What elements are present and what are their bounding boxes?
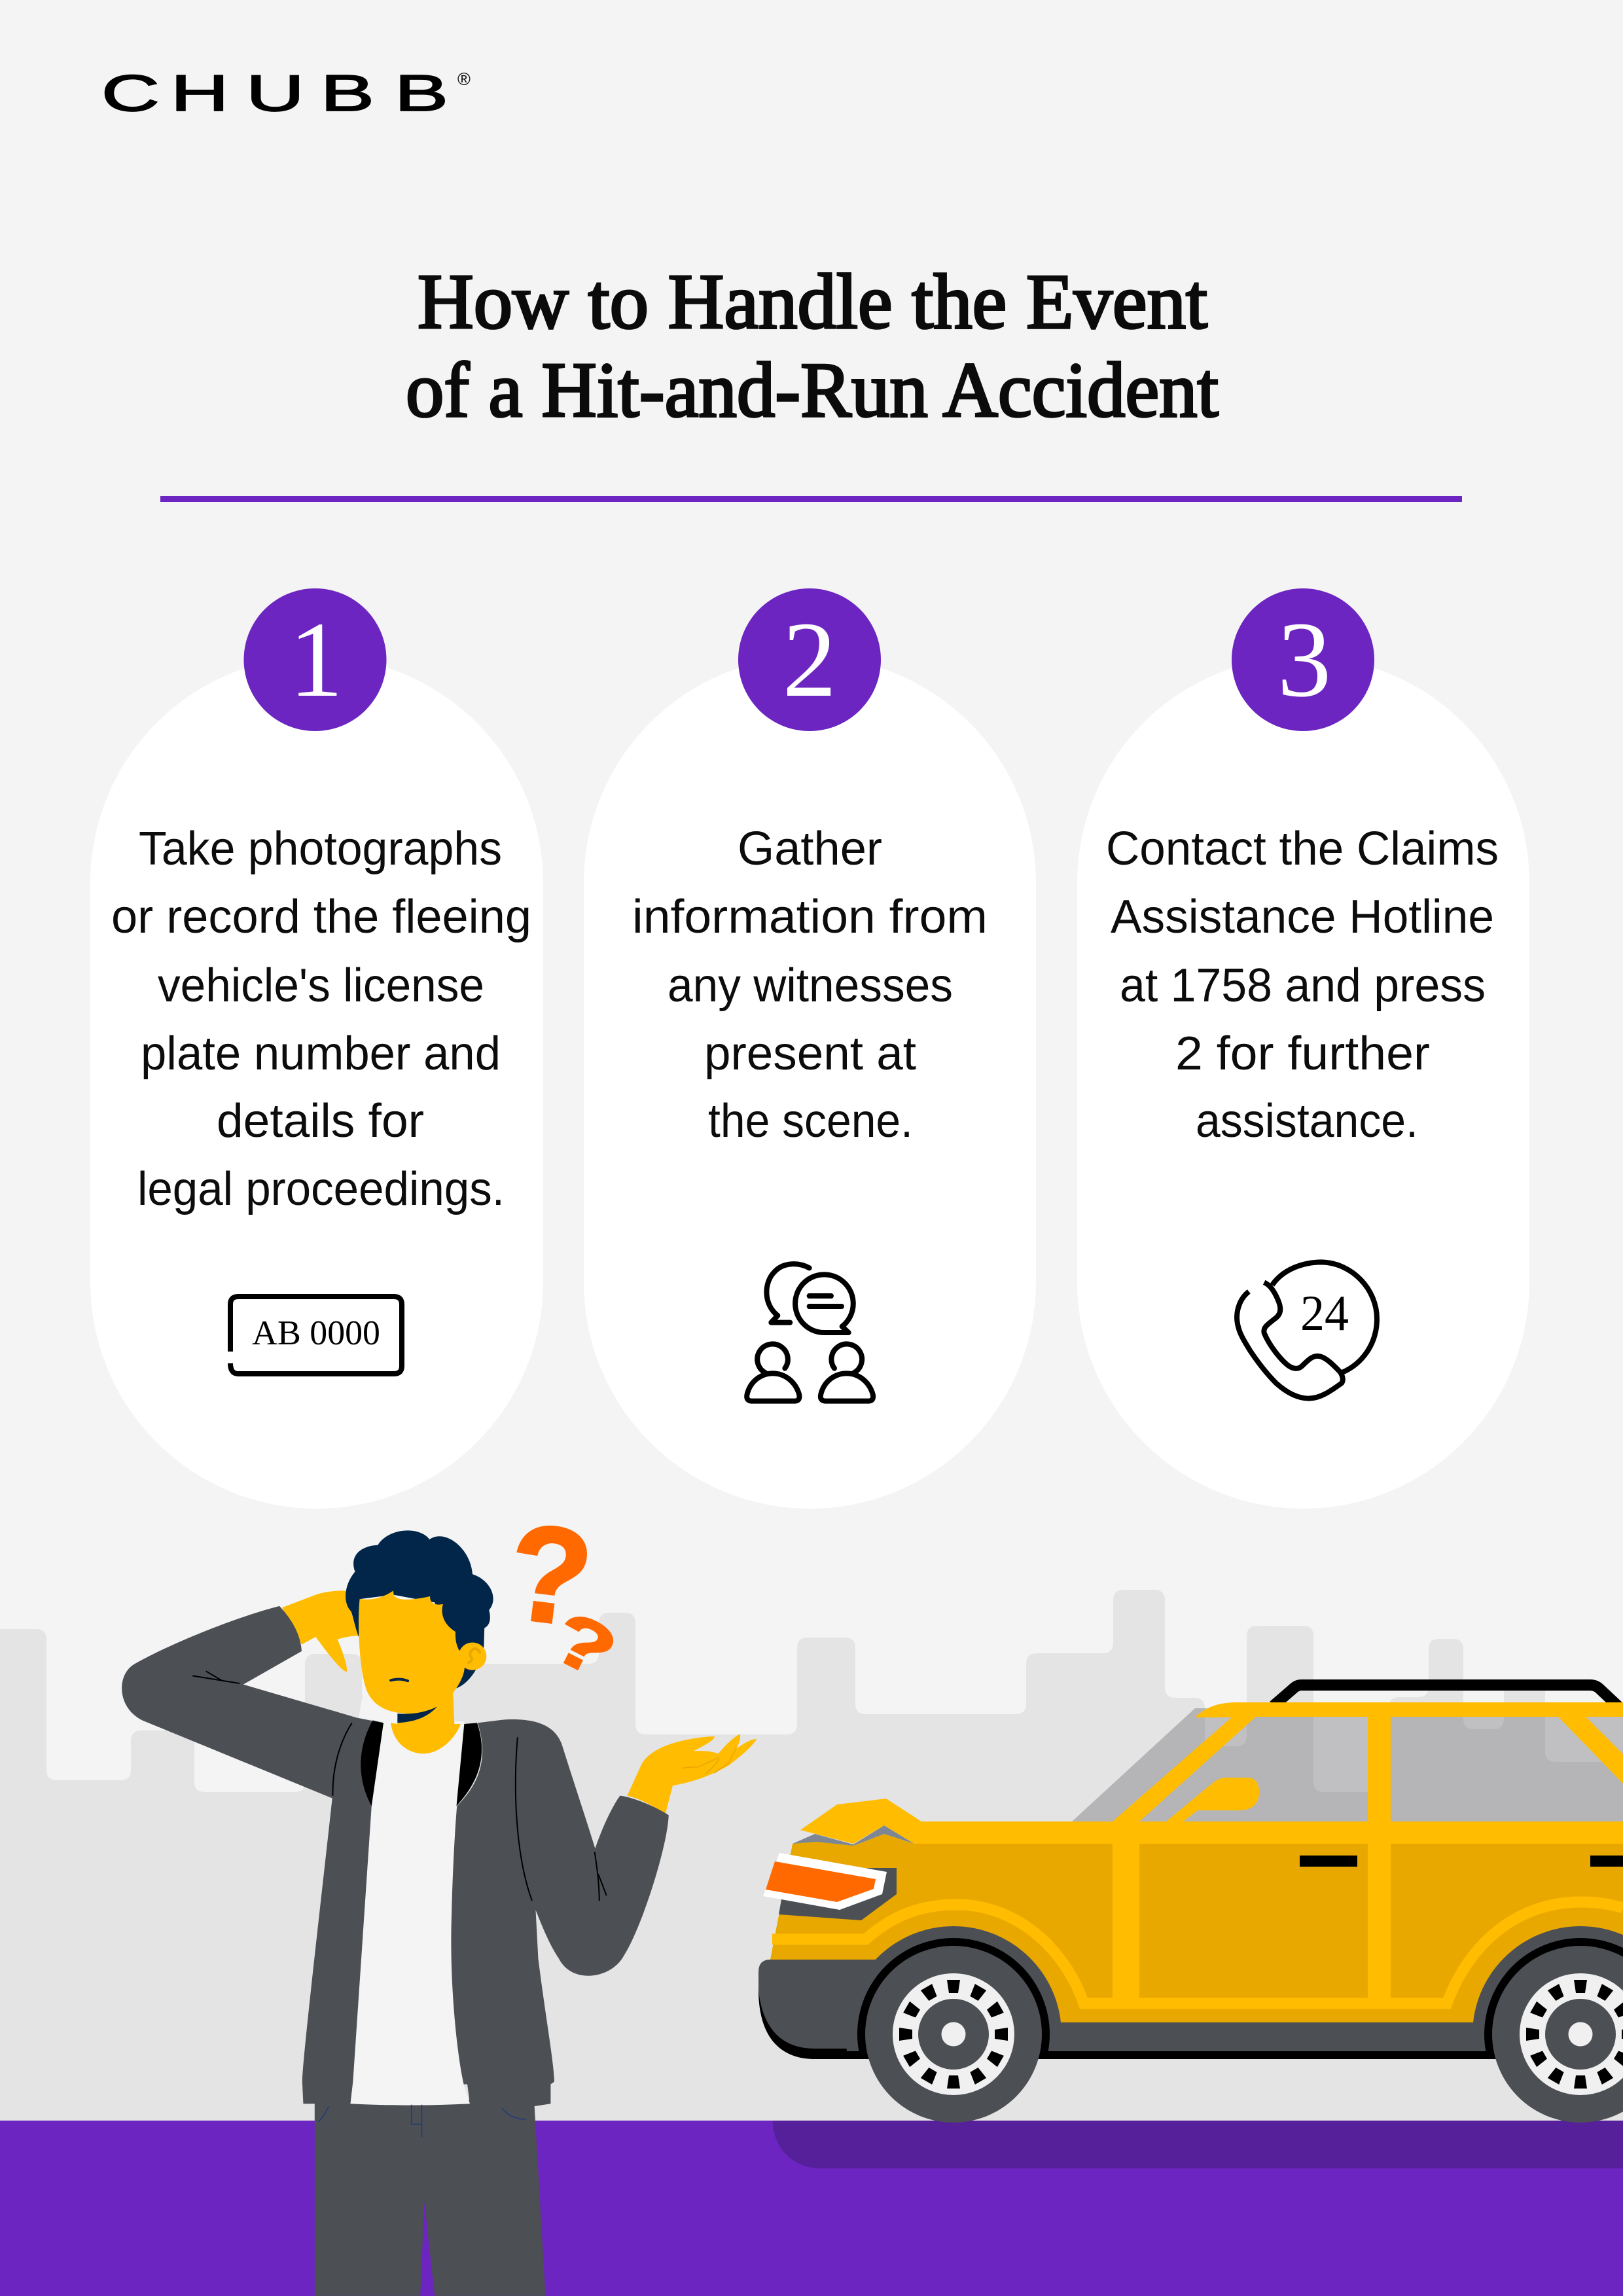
title: [406, 258, 1219, 433]
step 2 text: information from: [632, 891, 988, 943]
step 2 text: any witnesses: [668, 960, 953, 1012]
front wheel: [846, 1926, 1061, 2142]
card background 1: [90, 656, 543, 1509]
step 2 text: Gather: [738, 823, 882, 875]
neck: [391, 1689, 461, 1753]
panel: step 3: [1077, 588, 1529, 1509]
title: of a Hit-and-Run Accident: [406, 346, 1219, 433]
step 3 text: Assistance Hotline: [1111, 891, 1494, 943]
door handles: [1300, 1856, 1623, 1867]
card background 3: [1077, 656, 1529, 1509]
rear wheel: [1472, 1926, 1623, 2142]
title divider: [160, 496, 1462, 502]
jacket left side and raised arm: [122, 1606, 383, 2104]
step number 3: 3: [1277, 600, 1331, 719]
icon: license plate: AB 0000: [252, 1314, 380, 1352]
step 1 text: or record the fleeing: [111, 891, 531, 943]
step number 1: 1: [289, 600, 343, 719]
icon: 24 hour phone hotline: [1237, 1262, 1377, 1399]
step 1 text: legal proceedings.: [137, 1163, 505, 1215]
panel: step 2: [584, 588, 1036, 1509]
step 2 text: [632, 823, 988, 1147]
icon: witnesses talking: [747, 1264, 873, 1401]
road: [0, 2121, 1623, 2296]
door pillars: [1113, 1844, 1391, 2001]
illustration: confused man: [122, 1530, 757, 2296]
title: How to Handle the Event: [418, 258, 1207, 345]
jacket creases: [192, 1671, 607, 1901]
trouser seams: [318, 2105, 526, 2137]
mouth: [391, 1679, 408, 1681]
step 1 text: plate number and: [141, 1028, 501, 1080]
step 2 text: the scene.: [708, 1095, 913, 1147]
step 3 text: assistance.: [1196, 1095, 1418, 1147]
panel: step 1: [90, 588, 543, 1509]
step 2 text: present at: [704, 1028, 916, 1080]
step 3 text: 2 for further: [1175, 1028, 1430, 1080]
hair: [346, 1530, 493, 1689]
illustration: crashed yellow car: [758, 1685, 1623, 2142]
raised hand: [282, 1590, 359, 1672]
lower body: [758, 1960, 1623, 2059]
icon: license plate: [230, 1297, 402, 1374]
step number 2: [738, 588, 881, 731]
question marks: ?: [501, 1495, 599, 1655]
trim stripe: [772, 1902, 1623, 2003]
body: [770, 1834, 1623, 2026]
step 1 text: details for: [217, 1095, 424, 1147]
headlight: [763, 1853, 887, 1910]
car shadow: [773, 2121, 1623, 2168]
face: [359, 1590, 465, 1713]
crumpled hood underside: [793, 1825, 914, 1846]
logo: Chubb: CHUBB: [101, 65, 448, 122]
jacket lining: [357, 1720, 482, 1806]
collar: [359, 1697, 397, 1724]
step 1 text: Take photographs: [139, 823, 502, 875]
trousers: [315, 2100, 546, 2296]
step 3 text: [1106, 823, 1499, 1147]
step 3 text: at 1758 and press: [1120, 960, 1486, 1012]
step number 2: 2: [783, 600, 836, 719]
roof rack: [1274, 1685, 1620, 1708]
step 1 text: [111, 823, 531, 1215]
hand creases: [682, 1748, 736, 1774]
windows: [1072, 1708, 1623, 1821]
card background 2: [584, 656, 1036, 1509]
step number 1: [243, 588, 386, 731]
city skyline: [0, 1590, 1623, 2121]
question marks: ?: [539, 1595, 629, 1694]
logo: Chubb: ®: [457, 69, 471, 89]
headlight housing: [779, 1868, 897, 1920]
question marks: [501, 1495, 629, 1694]
crumpled hood: [800, 1799, 921, 1844]
ear: [459, 1642, 486, 1670]
car frame: [914, 1702, 1623, 1844]
open hand: [627, 1734, 757, 1815]
step 3 text: Contact the Claims: [1106, 823, 1499, 875]
icon: 24 hour phone hotline: 24: [1300, 1285, 1349, 1341]
step number 3: [1232, 588, 1374, 731]
white shirt: [350, 1720, 470, 2106]
chin shadow: [397, 1706, 437, 1723]
jacket right side and arm: [451, 1719, 669, 2106]
step 1 text: vehicle's license: [158, 960, 484, 1012]
